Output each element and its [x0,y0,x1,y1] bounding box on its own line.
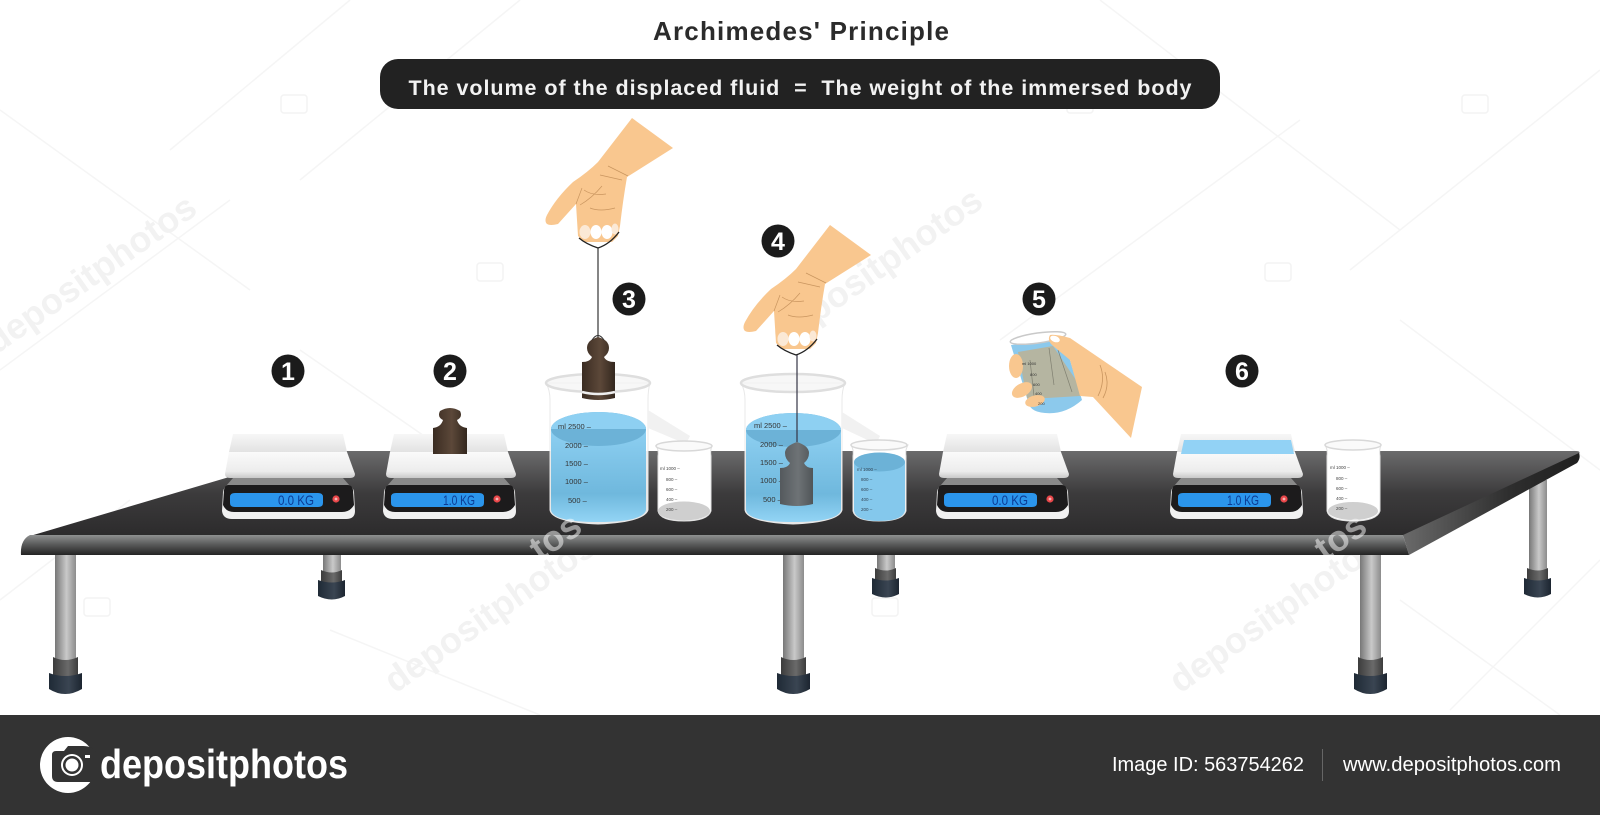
number badge 3 [612,282,646,316]
small beaker with displaced water: 200 – [861,507,873,512]
number badge 4: 4 [771,228,785,256]
logo wordmark: depositphotos [100,741,348,787]
large beaker with submerged weight: 2000 – [760,440,784,449]
formula banner: The volume of the displaced fluid = The weight of the immersed body [408,76,1192,100]
number badge 6: 6 [1235,358,1249,386]
empty scale reading 0.0 KG [222,434,355,519]
front table legs [49,555,1387,694]
hand holding beaker with water [1009,329,1142,438]
large beaker with water: 500 – [568,496,588,505]
watermark text over table: tos [521,504,589,569]
small beaker with displaced water: ml 1000 – [857,467,877,472]
small empty beaker [656,441,712,521]
large beaker with submerged weight: 500 – [763,495,783,504]
number badge 5: 5 [1032,286,1046,314]
small empty beaker: 200 – [1336,506,1348,511]
hand holding string [546,118,673,248]
scale with weight reading 1.0 KG [383,434,516,519]
empty scale reading 0.0 KG: 0.0 KG [992,492,1028,508]
step 3 [546,118,712,524]
number badge 5 [1022,282,1056,316]
small empty beaker: 800 – [1336,476,1348,481]
back table legs [318,480,1551,600]
small beaker with displaced water: 600 – [861,487,873,492]
step 4 [741,224,908,524]
table top surface [30,451,1580,536]
string into water [796,355,798,442]
scale with poured water reading 1.0 KG: 1.0 KG [1227,492,1259,508]
small empty beaker: 600 – [1336,486,1348,491]
formula banner [380,59,1220,109]
large beaker with water: 1000 – [565,477,589,486]
footer bar [0,715,1600,815]
table [21,451,1580,694]
background watermark: depositphotos [1161,525,1388,701]
large beaker with water: ml 2500 – [558,422,592,431]
string [597,248,599,338]
small empty beaker: 400 – [666,497,678,502]
small empty beaker: 400 – [1336,496,1348,501]
small empty beaker: ml 1000 – [660,466,680,471]
watermark text over table [521,504,1374,569]
empty scale reading 0.0 KG [936,434,1069,519]
hand holding string [744,225,871,355]
table side edge [1403,453,1580,555]
watermark text over table: tos [1306,504,1374,569]
scale with weight reading 1.0 KG: 1.0 KG [443,492,475,508]
step 1 [222,354,355,519]
small beaker with displaced water: 400 – [861,497,873,502]
weight hanging above water [582,336,615,400]
empty scale reading 0.0 KG: 0.0 KG [278,492,314,508]
step 5 [936,282,1142,519]
step 2 [383,354,516,519]
number badge 2 [434,354,466,388]
number badge 1: 1 [281,358,295,386]
hand holding beaker with water: 600 [1033,382,1040,387]
separator [1322,749,1323,781]
image id: Image ID: 563754262 [1112,754,1304,776]
large beaker with water: 1500 – [565,459,589,468]
small beaker with displaced water: 800 – [861,477,873,482]
large beaker with water [546,374,690,524]
scale with poured water reading 1.0 KG [1170,434,1303,519]
title: Archimedes' Principle [653,16,949,46]
large beaker with submerged weight [741,355,880,524]
number badge 4 [762,224,794,258]
large beaker with submerged weight: 1000 – [760,476,784,485]
hand holding beaker with water: ml 1000 [1022,361,1037,366]
table front edge [21,535,1409,555]
number badge 3: 3 [622,286,636,314]
brass weight on scale [433,408,467,454]
small empty beaker: ml 1000 – [1330,465,1350,470]
small beaker with displaced water [851,440,908,521]
website: www.depositphotos.com [1342,754,1561,776]
large beaker with submerged weight: ml 2500 – [754,421,788,430]
background watermark: depositphotos [763,179,990,355]
number badge 6 [1226,354,1258,388]
hand holding beaker with water: 200 [1038,401,1045,406]
small empty beaker: 600 – [666,487,678,492]
small empty beaker: 200 – [666,507,678,512]
small empty beaker: 800 – [666,477,678,482]
large beaker with water: 2000 – [565,441,589,450]
hand holding beaker with water: 800 [1030,372,1037,377]
number badge 2: 2 [443,358,457,386]
hand holding beaker with water: 400 [1035,391,1042,396]
step 6 [1170,354,1381,521]
submerged weight [780,442,813,506]
number badge 1 [272,354,304,388]
large beaker with submerged weight: 1500 – [760,458,784,467]
background watermark: depositphotos [376,525,603,701]
small empty beaker [1325,440,1381,521]
logo icon: camera [40,737,96,793]
